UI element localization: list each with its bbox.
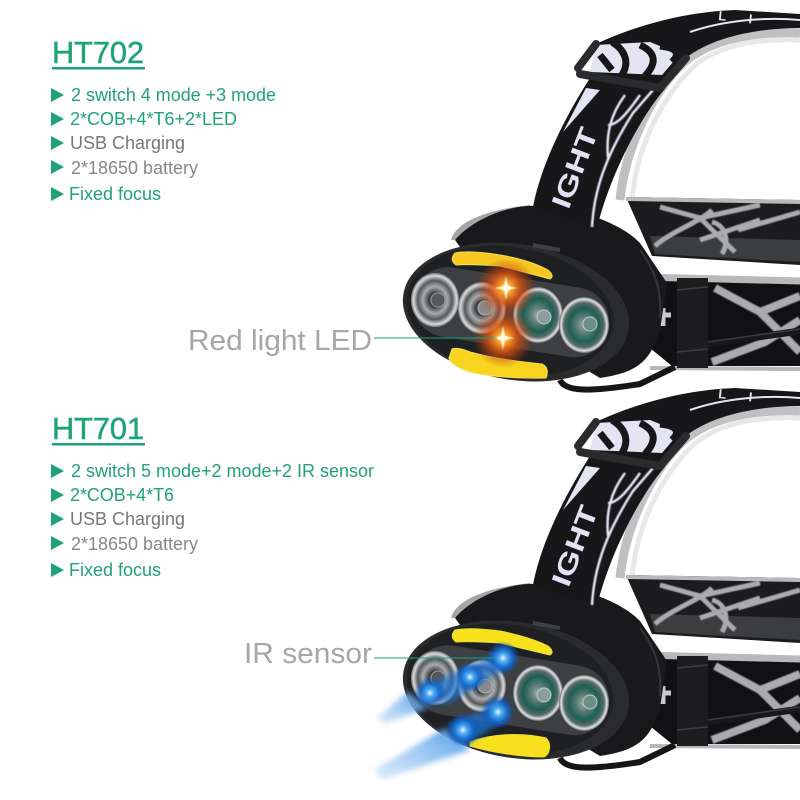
COB strip: bottom	[449, 348, 547, 378]
COB strip: top	[452, 629, 552, 655]
product photo: HT701 headlamp	[374, 386, 800, 780]
feature: Fixed focus: Fixed focus	[69, 184, 161, 204]
feature: 2*18650 battery: 2*18650 battery	[71, 534, 198, 554]
product photo: HT702 headlamp	[393, 8, 800, 397]
feature: 2*COB+4*T6+2*LED: 2*COB+4*T6+2*LED	[70, 109, 237, 129]
callout: IR sensor: IR sensor	[244, 638, 372, 670]
callout: Red light LED: Red light LED	[188, 325, 372, 357]
feature: 2*18650 battery: 2*18650 battery	[71, 158, 198, 178]
IR sensor glows	[486, 641, 520, 675]
feature: USB Charging: USB Charging	[70, 133, 185, 153]
feature list: HT701	[51, 461, 374, 580]
strap lettering: IGHT	[546, 501, 604, 591]
title: HT702: HT702	[52, 35, 144, 70]
IR rays	[374, 650, 510, 780]
feature list: HT702	[51, 85, 276, 204]
strap lettering top: LI	[718, 386, 753, 405]
red LED glow: top	[476, 258, 536, 318]
COB strip: bottom	[470, 735, 550, 757]
feature: Fixed focus: Fixed focus	[69, 560, 161, 580]
feature: 2*COB+4*T6: 2*COB+4*T6	[70, 485, 174, 505]
red LED star flares	[492, 276, 517, 350]
red LED glow: bottom	[473, 308, 533, 368]
strap lettering: IGHT	[546, 123, 604, 213]
COB strip: top	[452, 252, 552, 279]
feature: USB Charging: USB Charging	[70, 509, 185, 529]
feature: 2 switch 5 mode+2 mode+2 IR sensor: 2 switch 5 mode+2 mode+2 IR sensor	[71, 461, 374, 481]
title: HT701: HT701	[52, 411, 144, 446]
feature: 2 switch 4 mode +3 mode: 2 switch 4 mode +3 mode	[71, 85, 276, 105]
strap lettering top: LI	[718, 8, 753, 27]
